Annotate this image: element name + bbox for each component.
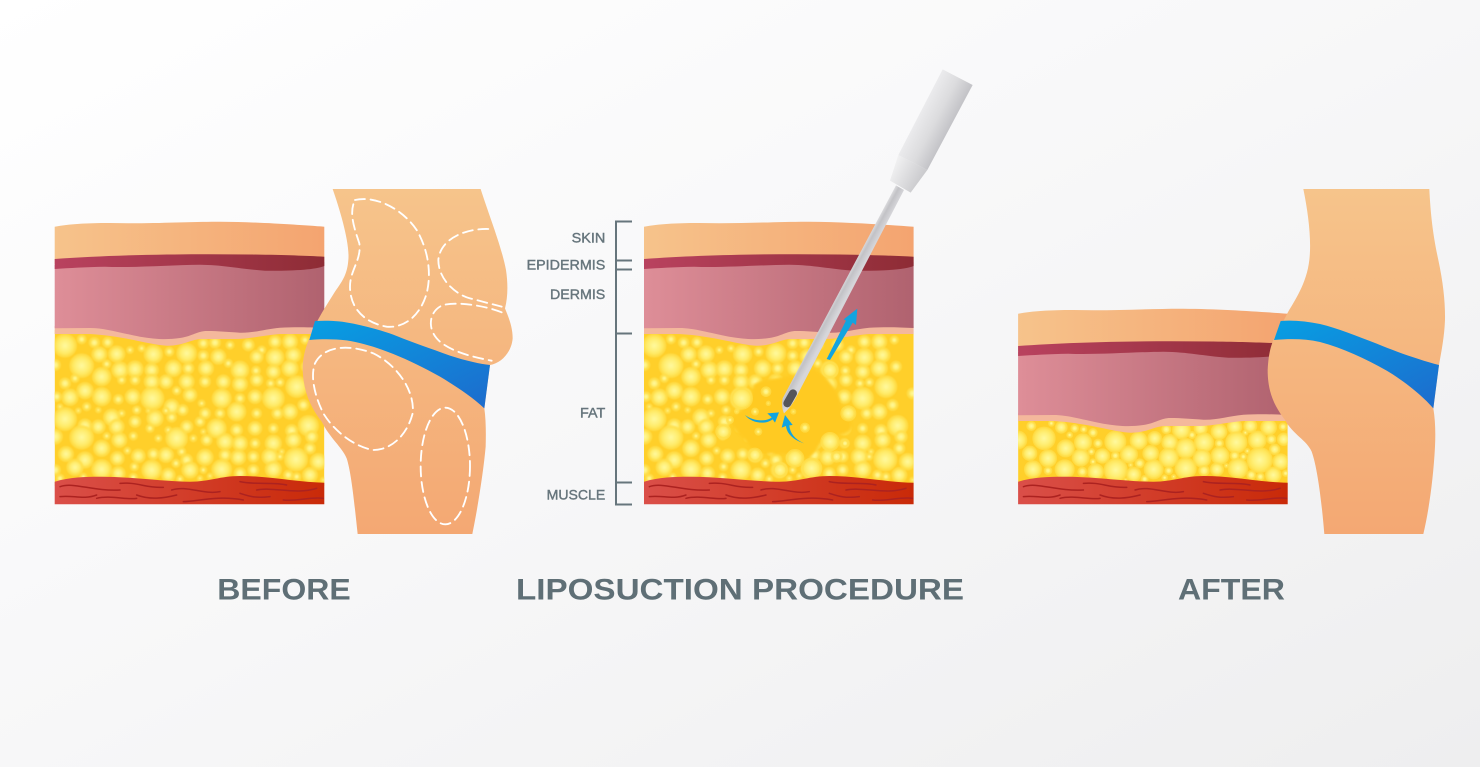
cannula suction port — [787, 393, 793, 403]
cannula collar — [890, 155, 927, 193]
layer bracket — [616, 222, 632, 504]
muscle layer — [55, 476, 324, 504]
arrow: upward flow — [827, 309, 857, 360]
heading: after: AFTER — [1178, 573, 1285, 606]
layer labels — [527, 230, 606, 503]
label: epidermis: EPIDERMIS — [527, 256, 605, 272]
fat layer — [1010, 415, 1289, 485]
body shape — [303, 189, 513, 534]
skin, epidermis and dermis layers — [1018, 309, 1288, 433]
panel: after skin cross-section — [1010, 309, 1289, 504]
heading: before: BEFORE — [217, 573, 351, 606]
heading: liposuction procedure: LIPOSUCTION PROCEDURE — [516, 573, 964, 606]
label: fat: FAT — [580, 404, 606, 420]
muscle layer — [644, 476, 914, 504]
cannula handle — [898, 69, 973, 170]
label: skin: SKIN — [572, 230, 605, 246]
skin, epidermis and dermis layers — [644, 222, 914, 346]
arrow: left inflow — [745, 412, 779, 423]
panel: before skin cross-section — [48, 222, 328, 504]
panel: after body silhouette — [1268, 189, 1445, 534]
icon: cannula instrument — [782, 69, 973, 413]
muscle layer — [1018, 476, 1288, 504]
panel: before body silhouette — [303, 189, 513, 534]
fat layer with suctioned area — [638, 330, 917, 486]
cannula needle — [782, 185, 904, 413]
fat layer — [48, 330, 328, 486]
skin, epidermis and dermis layers — [55, 222, 324, 346]
label: dermis: DERMIS — [550, 286, 605, 302]
blue underwear band — [1274, 321, 1439, 408]
arrow: lower inflow — [782, 415, 804, 443]
label: muscle: MUSCLE — [547, 487, 605, 503]
body shape — [1268, 189, 1445, 534]
panel: procedure skin cross-section — [638, 222, 917, 504]
blue underwear band — [309, 321, 490, 408]
icon: suction arrows — [745, 309, 857, 443]
dashed fat zones — [313, 199, 502, 524]
